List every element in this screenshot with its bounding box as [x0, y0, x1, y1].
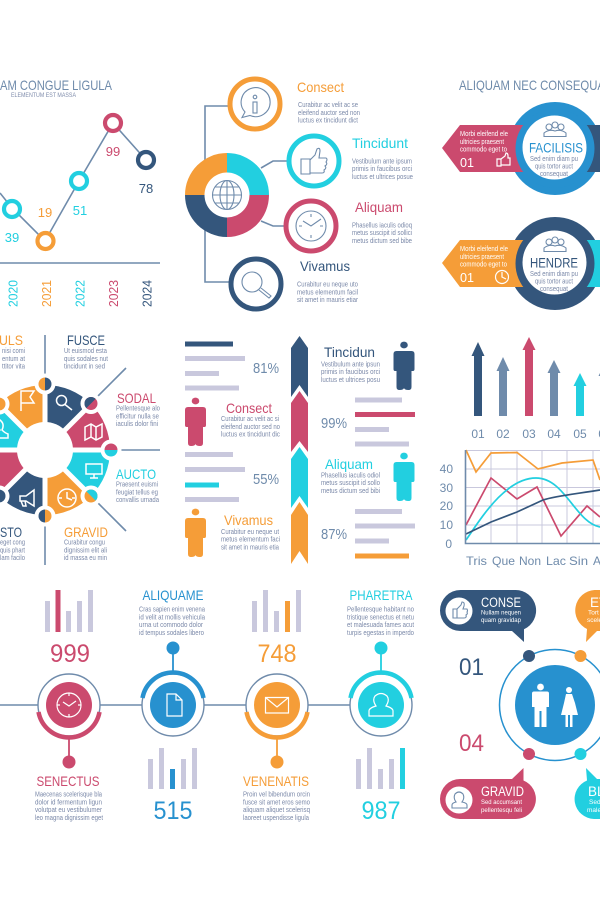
label: Aliquam: metus suscipit id sollici [352, 228, 412, 237]
label: Sto: quis phart [0, 546, 25, 554]
label: Vivamus: Vivamus [224, 512, 273, 528]
badge: Hendre: quis tortor auct [535, 276, 573, 286]
panel: segmented wheel [0, 332, 160, 565]
year labels: 2022 [74, 280, 88, 307]
label: Vivamus: metus elementum facil [297, 288, 358, 296]
badge: Hendre: Sed enim diam pu [530, 269, 578, 278]
label: Consect: luctus ex tincidunt dic [221, 430, 280, 438]
panel: hub and spoke [185, 79, 413, 309]
label: Aliquame: id velit at mollis vehicula [139, 612, 206, 622]
label: Pharetra [347, 587, 414, 637]
label: Tincidun: Tincidun [324, 344, 375, 360]
bars: 987: 987 [362, 797, 400, 825]
central disc with people [515, 665, 595, 745]
label: Venenatis: Proin vel bibendum orcin [243, 790, 310, 798]
badge: Facilisis: 01 [460, 156, 474, 170]
label: Sto: lam facilo [0, 553, 25, 562]
label: Aliquam: Phasellus iaculis odioq [352, 220, 412, 230]
badge: Hendre: HENDRE [530, 256, 578, 270]
callout: Conse: quam gravidap [481, 617, 521, 624]
label: Aliquam [321, 456, 380, 495]
label: Aliquam: Aliquam [355, 199, 403, 215]
bars: 55%: 55% [253, 471, 279, 488]
x axis labels [466, 554, 600, 568]
label: Aliquam: metus dictum sed bibe [352, 236, 412, 245]
panel: line chart by year [0, 77, 160, 307]
label: Venenatis: fusce sit amet eros semo [243, 798, 310, 806]
chart title: AM CONGUE LIGULA [0, 77, 113, 93]
year labels [6, 280, 154, 307]
wheel segments [0, 380, 115, 520]
label: Fusce: Ut euismod esta [64, 346, 108, 355]
node: Pharetra [350, 642, 412, 736]
label: Venenatis: laoreet uspendisse ligula [243, 813, 310, 822]
badge: Hendre [442, 217, 600, 310]
wheel icons [0, 391, 102, 507]
label: Aucto: convallis urnada [116, 495, 160, 504]
icon: clock [286, 201, 336, 251]
x axis labels: Tris [466, 554, 487, 568]
bars: 748 [252, 590, 301, 668]
label: Gravid: Curabitur congu [64, 538, 105, 546]
label: Tincidun: Vestibulum ante ipsun [321, 360, 380, 368]
label: Pharetra: Pellentesque habitant no [347, 604, 414, 614]
label: Consect [221, 400, 280, 438]
label: Senectus [35, 773, 103, 822]
label: Venenatis [243, 773, 310, 822]
bars: 515: 515 [154, 797, 192, 825]
label: Sto [0, 524, 25, 562]
label: Sodal: iaculis dolor fini [116, 419, 158, 428]
label: Aliquam [352, 199, 412, 245]
arrow labels: 01 [471, 427, 485, 441]
arrow labels: 05 [573, 427, 587, 441]
axes [466, 450, 600, 544]
label: Senectus: SENECTUS [36, 773, 100, 789]
year labels: 2021 [40, 280, 54, 307]
bars: 999 [45, 590, 93, 668]
label: Vivamus: metus elementum faci [221, 534, 280, 544]
central ring chart [185, 153, 269, 237]
badge: Hendre: commodo eget to [460, 262, 507, 268]
label: Sto: STO [0, 524, 22, 540]
spokes [45, 335, 160, 565]
bars: 515 [148, 748, 197, 825]
bars: 81% [185, 342, 279, 390]
label: Aliquam: metus suscipit id sollo [321, 478, 380, 487]
y axis labels: 30 [440, 481, 453, 495]
arrow labels: 02 [496, 427, 510, 441]
badge: Hendre: consequat [540, 284, 568, 293]
label: Gravid [64, 524, 108, 562]
label: Fusce [64, 332, 108, 370]
label: Consect [297, 79, 360, 124]
x axis labels: Non [519, 554, 541, 568]
label: Aucto: Praesent euismi [116, 480, 158, 488]
label: Senectus: Maecenas scelerisque bla [35, 790, 103, 798]
orbit dots [523, 650, 586, 760]
label: Vivamus: sit amet in mauris etiar [297, 295, 358, 304]
label: Uls [0, 332, 26, 370]
label: Sodal: Pellentesque alo [116, 404, 160, 412]
label: Sodal: SODAL [117, 390, 156, 406]
label: Consect: eleifend auctor sed no [221, 422, 280, 431]
badge: Hendre: 01 [460, 271, 474, 285]
badge: Facilisis: Morbi eleifend ele [460, 131, 508, 138]
icon: thumbs up [289, 136, 339, 186]
label: Vivamus [297, 258, 358, 304]
label: Tincidunt: luctus et ultrices posue [352, 172, 413, 181]
label: Tincidunt: primis in faucibus orci [352, 164, 412, 173]
label: Fusce: tincidunt in sed [64, 362, 105, 370]
numbers: 01 [459, 654, 484, 681]
arrow labels: 04 [547, 427, 561, 441]
node: Aliquame [142, 642, 204, 736]
bars: 99%: 99% [321, 415, 347, 432]
bars: 81%: 81% [253, 360, 279, 377]
segment dots [0, 374, 122, 526]
label: Vivamus: Curabitur eu neque uto [297, 280, 358, 288]
label: Pharetra: turpis egestas in imperdo [347, 628, 414, 637]
y axis labels [440, 462, 453, 551]
label: Aliquame [139, 587, 206, 637]
label: Consect: Consect [297, 79, 344, 95]
label: Aliquam: Aliquam [325, 456, 373, 472]
label: Fusce: FUSCE [67, 332, 105, 348]
label: Aliquam: metus dictum sed bibi [321, 486, 380, 495]
person: Vivamus [185, 509, 206, 557]
callout: Bl [575, 768, 600, 819]
callout: Et [575, 590, 600, 642]
callout: Gravid [440, 768, 536, 819]
arrows [472, 337, 600, 416]
value labels: 99 [106, 144, 120, 159]
bars: 55% [185, 452, 279, 502]
label: Senectus: volutpat eu vestibulumer [35, 805, 102, 814]
panel: people orbit [440, 590, 600, 819]
label: Consect: Curabitur ac velit ac si [221, 414, 279, 423]
label: Aucto: feugiat tellus eg [116, 488, 158, 496]
person: Aliquam [394, 453, 414, 501]
value labels: 51 [73, 203, 87, 218]
connectors [205, 106, 290, 282]
y axis labels: 0 [445, 537, 452, 551]
label: Aliquame: urna ut commodo dolor [139, 620, 203, 629]
y axis labels: 40 [440, 462, 453, 476]
y axis labels: 10 [440, 518, 453, 532]
label: Vivamus: Vivamus [300, 258, 350, 274]
person: Tincidun [394, 342, 414, 390]
bars: 987 [356, 748, 405, 825]
callout: Et: Tort [588, 610, 599, 616]
label: Gravid: id massa eu min [64, 553, 107, 562]
label: Consect: luctus ex tincidunt dict [298, 116, 358, 124]
value labels: 39 [5, 230, 19, 245]
bars: 87%: 87% [321, 526, 347, 543]
year labels: 2023 [107, 280, 121, 307]
label: Pharetra: tristique senectus et netu [347, 612, 414, 622]
series lines [466, 450, 600, 540]
label: Sto: eget cong [0, 538, 25, 546]
label: Uls: entum at [2, 354, 25, 363]
label: Sodal: efficitur nulla se [116, 412, 159, 420]
label: Sodal [116, 390, 160, 428]
orbit ring [500, 650, 600, 760]
label: Tincidun [321, 344, 380, 384]
icon: magnifier [231, 259, 281, 309]
callout: Conse: CONSE [481, 595, 521, 610]
x axis labels: Sin [569, 554, 588, 568]
grid [465, 450, 600, 543]
label: Consect: eleifend auctor sed non [298, 108, 360, 117]
badge: Hendre: ultricies praesent [460, 254, 504, 261]
arrow labels [471, 427, 600, 441]
x axis labels: Que [492, 554, 515, 568]
bars: 999: 999 [50, 640, 90, 668]
badge: Hendre: Morbi eleifend ele [460, 246, 508, 253]
callout: Gravid: pellentesqu feli [481, 807, 522, 814]
panel: arrow column chart [471, 337, 600, 441]
value labels [5, 144, 153, 245]
trend line [0, 123, 146, 241]
badge: Facilisis: Sed enim diam pu [530, 154, 578, 163]
label: Tincidun: luctus et ultrices posu [321, 375, 380, 384]
label: Venenatis: VENENATIS [243, 773, 309, 789]
label: Gravid: dignissim elit ali [64, 546, 107, 554]
label: Aucto: AUCTO [116, 466, 156, 482]
label: Tincidunt: Vestibulum ante ipsum [352, 156, 412, 166]
label: Pharetra: et malesuada fames acut [347, 620, 414, 629]
label: Fusce: quis sodales nut [64, 354, 108, 363]
label: Aliquame: Cras sapien enim venena [139, 604, 206, 614]
label: Pharetra: PHARETRA [350, 587, 413, 603]
label: Consect: Consect [226, 400, 272, 416]
arrow labels: 03 [522, 427, 536, 441]
callout: Conse: Nullam nequen [481, 610, 521, 616]
callout: Conse [440, 590, 536, 642]
label: Uls: ttitor vita [2, 362, 26, 370]
numbers: 04 [459, 730, 484, 757]
badge: Facilisis: consequat [540, 169, 568, 178]
label: Tincidunt [352, 135, 413, 181]
label: Consect: Curabitur ac velit ac se [298, 100, 358, 109]
badge: Facilisis: commodo eget to [460, 146, 507, 154]
label: Vivamus [221, 512, 280, 552]
label: Venenatis: aliquam aliquet scelerisq [243, 805, 310, 814]
label: Aucto [116, 466, 160, 504]
node: Senectus [38, 674, 100, 768]
label: Tincidun: primis in faucibus orci [321, 367, 380, 376]
panel: arrow badges [442, 77, 600, 310]
bars: 87% [321, 509, 415, 558]
panel: multi-line chart [440, 450, 600, 568]
callout: Gravid: GRAVID [481, 784, 524, 799]
label: Vivamus: sit amet in mauris etia [221, 542, 280, 552]
label: Aliquame: id tempus sodales libero [139, 628, 204, 637]
chevron column [291, 336, 308, 564]
bars: 99% [321, 398, 415, 446]
panel: timeline [0, 587, 414, 825]
badge: Facilisis [442, 102, 600, 195]
badge: Facilisis: quis tortor auct [535, 162, 573, 170]
year labels: 2024 [140, 280, 154, 307]
label: Vivamus: Curabitur eu neque ut [221, 527, 279, 536]
label: Aliquam: Phasellus iaculis odiol [321, 470, 380, 480]
label: Tincidunt: Tincidunt [352, 135, 408, 151]
year labels: 2020 [6, 280, 20, 307]
badge: Facilisis: FACILISIS [529, 140, 583, 156]
badge: Facilisis: ultricies praesent [460, 139, 504, 146]
bars: 748: 748 [258, 640, 296, 668]
y axis labels: 20 [440, 499, 453, 513]
data points [4, 115, 154, 249]
label: Uls: nisi comi [2, 346, 25, 355]
value labels: 19 [38, 205, 52, 220]
timeline axis [0, 704, 381, 706]
value labels: 78 [139, 181, 153, 196]
x axis labels: Lac [546, 554, 566, 568]
panel: people statistics [185, 336, 415, 564]
label: Gravid: GRAVID [64, 524, 108, 540]
person: Consect [185, 398, 206, 446]
label: Aliquame: ALIQUAME [142, 587, 204, 603]
axis [0, 262, 160, 264]
chart title: ELEMENTUM EST MASSA [11, 93, 76, 99]
node: Venenatis [246, 674, 308, 768]
label: Senectus: dolor id fermentum ligun [35, 798, 102, 806]
callout: Gravid: Sed accumsant [481, 799, 522, 806]
label: Senectus: leo magna dignissim eget [35, 813, 103, 822]
icon: info bubble [230, 79, 280, 129]
chart title [0, 77, 113, 99]
numbers [459, 654, 484, 757]
